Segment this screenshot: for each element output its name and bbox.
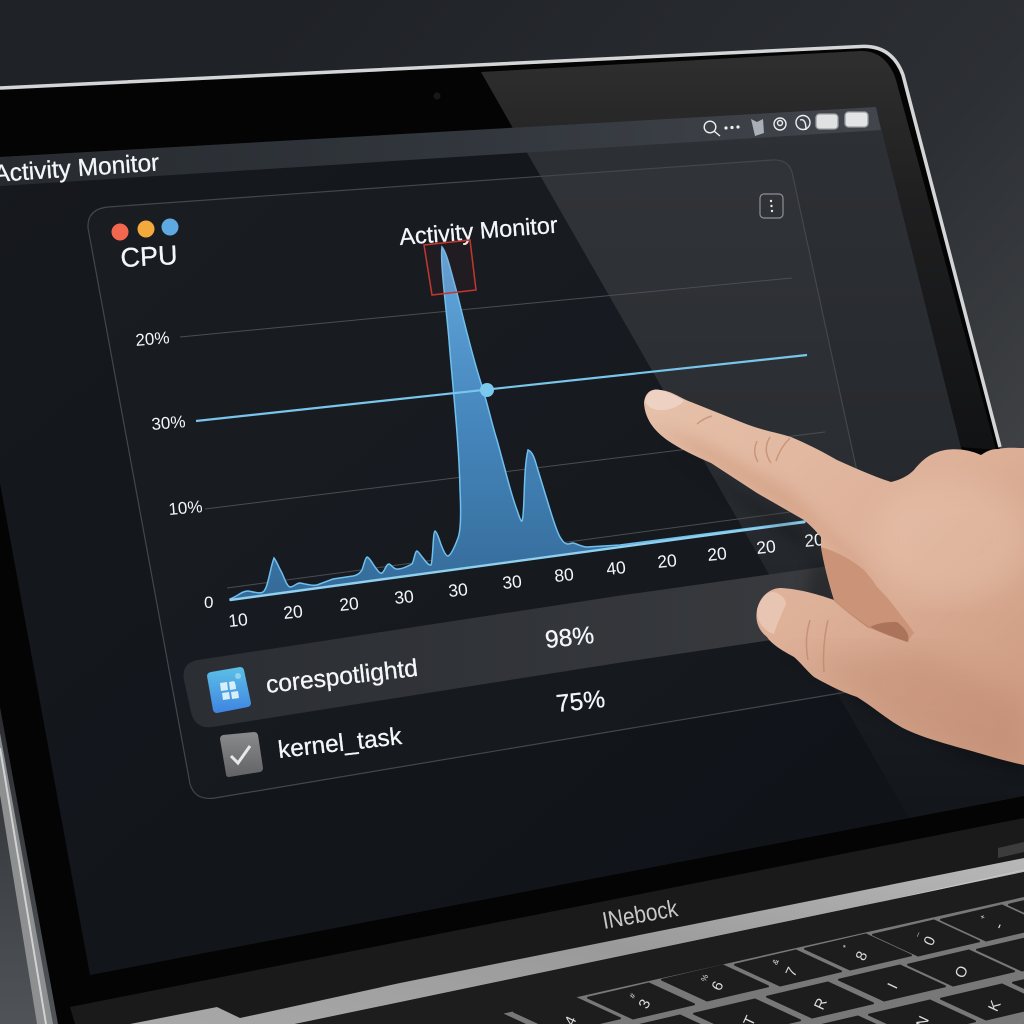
keyboard: _ — [909, 929, 920, 938]
fingernail: thumb — [757, 592, 786, 634]
x axis labels: 30 — [447, 579, 469, 601]
brand logo: INebock — [600, 895, 681, 935]
y axis labels: 30% — [151, 412, 186, 434]
process row: corespotlightd — [184, 563, 870, 727]
key legends: 7 — [782, 965, 801, 979]
process name: corespotlightd — [265, 655, 419, 699]
lid left frame — [0, 733, 53, 1024]
y axis labels: 0 — [204, 593, 213, 612]
process name: kernel_task — [277, 723, 404, 764]
key legends: I — [884, 981, 902, 992]
keyboard: % — [699, 973, 710, 983]
key legends: K — [985, 998, 1005, 1014]
silver hinge strip — [130, 858, 1024, 1024]
peak highlight box — [424, 240, 476, 295]
threshold line — [196, 355, 807, 421]
x axis labels: 20 — [656, 550, 678, 572]
x axis labels: 20 — [803, 529, 825, 551]
hand pointing at chart — [644, 390, 1024, 770]
keyboard: * — [841, 944, 850, 950]
bezel glare — [481, 51, 996, 450]
process value: 75% — [555, 686, 606, 718]
area spike — [230, 247, 805, 600]
process value: 98% — [544, 622, 595, 654]
screen reflection — [514, 107, 1024, 818]
y axis labels: 10% — [168, 497, 203, 519]
x axis labels: 20 — [282, 601, 304, 623]
camera — [434, 92, 440, 100]
notch — [998, 842, 1024, 858]
baseline — [230, 522, 805, 600]
key legends: 8 — [852, 949, 871, 963]
menu bar status icons — [704, 112, 868, 136]
key legends: O — [952, 963, 972, 981]
laptop chin — [70, 818, 1024, 1024]
key legends — [561, 920, 1008, 1024]
key legends: 0 — [920, 934, 939, 948]
panel: activity monitor window — [88, 160, 870, 798]
middle finger — [821, 547, 914, 642]
finger creases — [697, 416, 870, 672]
x axis labels: 80 — [553, 564, 575, 586]
x axis labels — [227, 529, 825, 631]
x axis labels: 20 — [706, 543, 728, 565]
x axis labels: 30 — [393, 586, 415, 608]
x axis labels: 20 — [338, 593, 360, 615]
keyboard deck — [295, 872, 1024, 1024]
x axis labels: 20 — [755, 536, 777, 558]
key legends: R — [811, 995, 831, 1013]
menu bar — [0, 107, 881, 188]
key legends: 3 — [635, 997, 654, 1011]
keyboard: & — [771, 957, 781, 966]
keyboard: + — [978, 913, 988, 921]
x axis labels: 40 — [605, 557, 627, 579]
x axis labels: 30 — [501, 571, 523, 593]
icon: more options button — [760, 194, 783, 218]
finger gap shadow — [870, 622, 908, 642]
key legends: - — [990, 920, 1008, 932]
traffic lights — [112, 218, 178, 240]
keyboard — [440, 890, 1024, 1024]
y axis labels: 20% — [135, 328, 170, 350]
hand shadow — [660, 440, 1024, 775]
threshold marker — [480, 383, 494, 397]
cpu heading: CPU — [120, 240, 178, 273]
icon: check box — [220, 732, 263, 777]
process row: kernel_task — [220, 686, 606, 777]
y axis labels — [135, 328, 213, 612]
key legends: 6 — [708, 979, 727, 993]
x axis labels: 10 — [227, 609, 249, 631]
background lower left — [0, 700, 70, 1024]
fingernail: index — [645, 390, 684, 410]
cpu chart — [135, 240, 825, 631]
keyboard: # — [628, 992, 638, 1000]
lid top and right silver edge — [0, 46, 1000, 447]
chart title: Activity Monitor — [398, 212, 559, 250]
hand shading — [670, 432, 1024, 744]
icon: corespotlightd app — [207, 667, 251, 713]
